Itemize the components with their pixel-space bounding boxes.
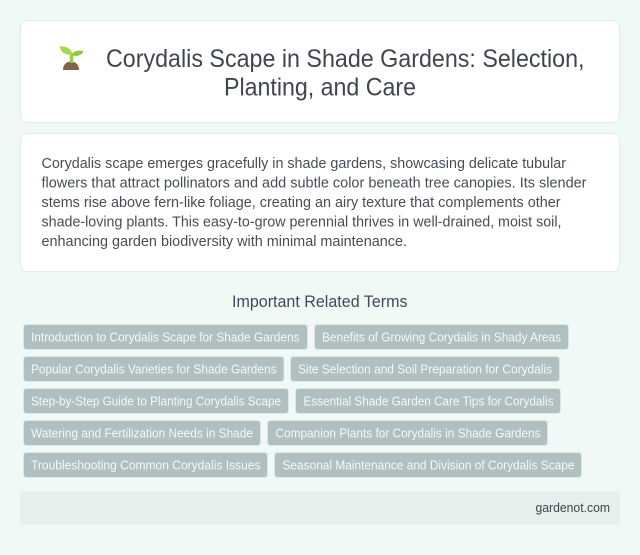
text block: description xyxy=(42,155,587,250)
tag: Popular Corydalis Varieties for Shade Gardens xyxy=(31,362,277,376)
tag: Step-by-Step Guide to Planting Corydalis Scape xyxy=(31,394,281,408)
tag: Troubleshooting Common Corydalis Issues xyxy=(31,458,261,472)
tag: Seasonal Maintenance and Division of Corydalis Scape xyxy=(282,458,574,472)
tag xyxy=(24,356,284,382)
tag xyxy=(274,452,582,478)
tag: Introduction to Corydalis Scape for Shade Gardens xyxy=(31,330,300,344)
text block: description: enhancing garden biodiversity with minimal maintenance. xyxy=(42,233,407,250)
tag xyxy=(268,420,548,446)
footer: gardenot.com xyxy=(536,501,610,515)
text block: description: shade-loving plants. This easy-to-grow perennial thrives in well-drained, moist soil, xyxy=(42,214,562,230)
title xyxy=(106,45,584,102)
panel: related term tags xyxy=(24,324,582,478)
footer xyxy=(20,491,620,525)
panel: title card xyxy=(20,20,620,122)
tag xyxy=(24,324,308,350)
tag: Watering and Fertilization Needs in Shade xyxy=(31,426,253,440)
tag xyxy=(24,388,288,414)
tag: Benefits of Growing Corydalis in Shady Areas xyxy=(322,330,561,344)
tag xyxy=(290,356,560,382)
tag: Site Selection and Soil Preparation for Corydalis xyxy=(298,362,552,376)
tag xyxy=(24,452,268,478)
text block: description: flowers that attract pollinators and add subtle color beneath tree canopies. Its slender xyxy=(42,174,587,192)
tag: Companion Plants for Corydalis in Shade Gardens xyxy=(276,426,541,440)
title: Corydalis Scape in Shade Gardens: Selection, xyxy=(106,45,584,73)
text block: description: Corydalis scape emerges gracefully in shade gardens, showcasing delicate tubular xyxy=(42,155,566,172)
text block: description: stems rise above fern-like foliage, creating an airy texture that complements other xyxy=(42,194,561,211)
tag: Essential Shade Garden Care Tips for Corydalis xyxy=(304,394,554,408)
icon: seedling xyxy=(60,46,84,70)
tag xyxy=(24,420,260,446)
tag xyxy=(314,324,568,350)
title: Planting, and Care xyxy=(224,74,416,102)
panel: description card xyxy=(20,134,620,272)
heading: related terms: Important Related Terms xyxy=(232,293,408,311)
tag xyxy=(296,388,560,414)
